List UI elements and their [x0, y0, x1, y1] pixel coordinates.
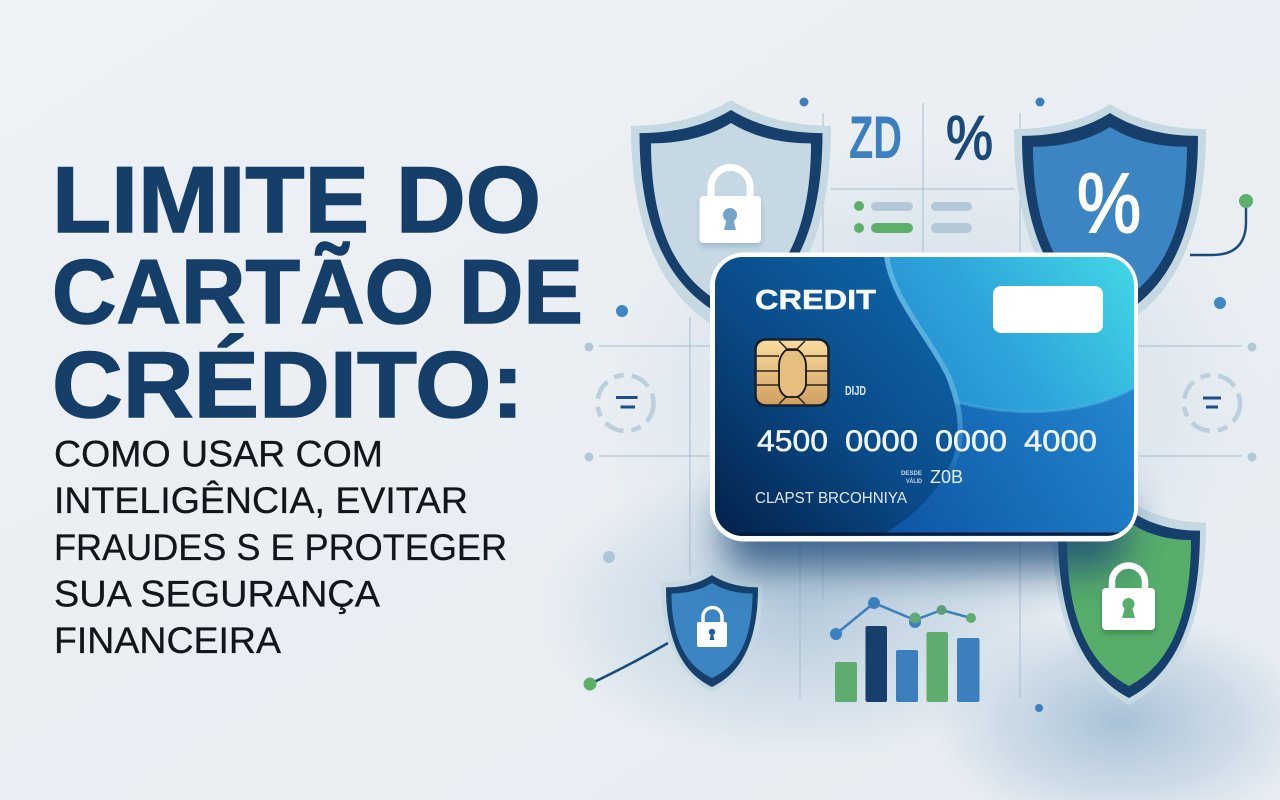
status list	[854, 201, 972, 233]
expiry: Z0B	[930, 467, 963, 487]
title: CRÉDITO:	[52, 332, 524, 437]
icon: small padlock	[697, 608, 727, 647]
card shadow	[725, 490, 1125, 570]
card number: 4000	[1024, 425, 1097, 458]
line chart overlay	[830, 597, 976, 640]
percent sign: %	[1077, 156, 1141, 250]
icon: chip	[756, 340, 828, 406]
signature box	[993, 286, 1103, 333]
grid lines	[599, 103, 1242, 698]
subtitle: FRAUDES S E PROTEGER	[54, 527, 507, 568]
cardholder name: CLAPST BRCOHNIYA	[755, 490, 907, 507]
icon: left dashed ring	[598, 375, 654, 431]
card number: 0000	[845, 425, 918, 458]
contactless mark: DIJD	[845, 383, 866, 398]
connector: top right	[1190, 194, 1253, 255]
card number	[757, 425, 1097, 458]
title	[52, 147, 583, 437]
card brand: CREDIT	[755, 284, 876, 315]
shield: lock top left	[631, 100, 831, 335]
icon: white padlock	[700, 168, 761, 247]
connector: bottom left	[584, 643, 668, 690]
title: CARTÃO DE	[52, 242, 583, 343]
card face	[715, 257, 1134, 536]
value label: logo: ZD	[849, 104, 902, 171]
icon: right dashed ring	[1184, 375, 1240, 431]
decorative dots	[584, 98, 1256, 712]
credit card	[710, 252, 1138, 542]
card number: 0000	[935, 425, 1007, 458]
subtitle	[54, 434, 507, 661]
title: LIMITE DO	[52, 147, 541, 252]
shield: percent top right	[1014, 104, 1206, 332]
subtitle: COMO USAR COM	[54, 434, 383, 474]
shield: small blue lock	[661, 569, 763, 692]
subtitle: SUA SEGURANÇA	[54, 574, 380, 614]
card number: 4500	[757, 425, 828, 458]
icon: green shield padlock	[1102, 566, 1155, 634]
small valid label: DESDE	[901, 471, 922, 477]
bar chart	[830, 597, 980, 702]
percent symbol: %	[946, 104, 993, 173]
small valid label: VÁLID	[906, 478, 923, 485]
subtitle: INTELIGÊNCIA, EVITAR	[54, 480, 468, 521]
small valid label	[901, 471, 923, 485]
shield: green lock	[1052, 500, 1206, 705]
subtitle: FINANCEIRA	[54, 620, 281, 661]
